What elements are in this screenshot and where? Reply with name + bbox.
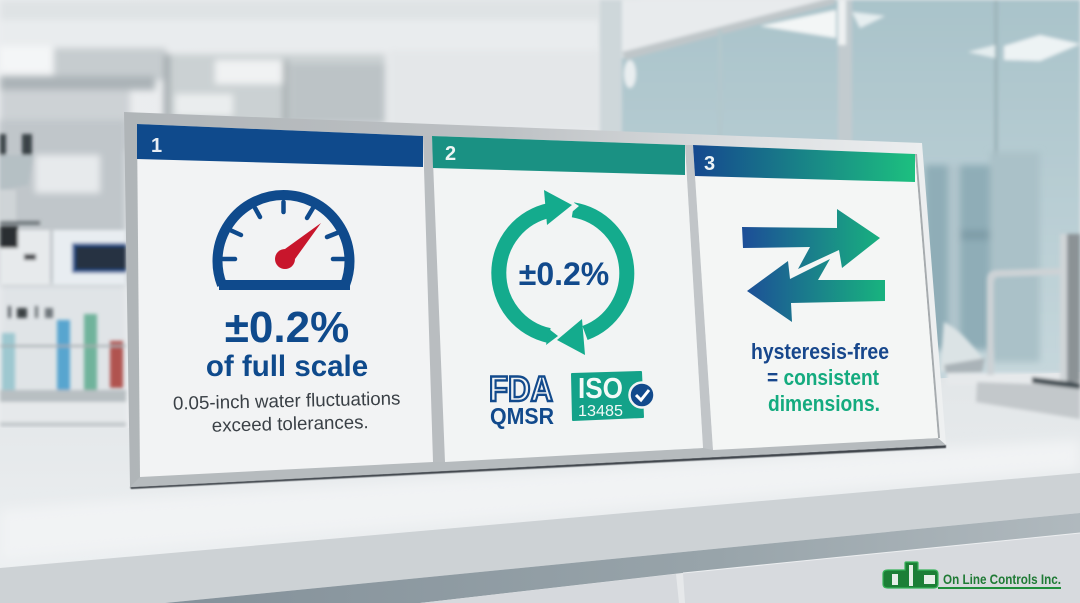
logo: FDA QMSR: QMSR xyxy=(490,403,554,429)
counter top xyxy=(0,372,1080,568)
panel 1 xyxy=(137,124,433,477)
glass partition xyxy=(600,0,1080,385)
icon: check badge xyxy=(630,382,654,408)
panel 2 header: 2 xyxy=(445,143,456,165)
logo: On Line Controls Inc. xyxy=(883,562,1061,589)
panel 3 header xyxy=(693,145,915,182)
metal stand at right xyxy=(940,234,1080,419)
icon: opposing arrows xyxy=(742,209,885,322)
counter front edge xyxy=(0,473,1080,603)
icon: gauge xyxy=(218,195,350,290)
cabinet recess shadow xyxy=(165,513,1080,603)
stat caption: of full scale: of full scale xyxy=(206,350,368,383)
panel 1 header xyxy=(137,124,423,167)
body text: exceed tolerances. xyxy=(212,411,369,436)
panel 2 xyxy=(432,136,703,462)
logo: FDA QMSR: FDA xyxy=(489,370,553,409)
badge: ISO 13485: 13485 xyxy=(578,403,623,420)
body text: 0.05-inch water fluctuations xyxy=(173,387,401,414)
cycle value: ±0.2% xyxy=(519,256,609,292)
cabinets xyxy=(420,533,1080,603)
microscope, device and test tubes xyxy=(0,120,126,427)
panel 2 header xyxy=(432,136,685,175)
panel 1 header: 1 xyxy=(151,135,162,157)
badge: ISO 13485: ISO xyxy=(578,373,623,405)
badge: ISO 13485 xyxy=(571,371,654,421)
panel 3 header: 3 xyxy=(704,153,715,175)
stat: ±0.2%: ±0.2% xyxy=(225,303,349,352)
text: hysteresis-free: hysteresis-free xyxy=(751,339,889,364)
text: = consistent: = consistent xyxy=(767,365,879,390)
shelves behind glass xyxy=(925,152,1040,362)
panel 3 xyxy=(693,145,938,450)
body text xyxy=(173,387,401,437)
logo: FDA QMSR xyxy=(489,370,554,429)
icon: cycle arrows xyxy=(499,190,627,355)
display frame xyxy=(124,112,946,489)
text: dimensions.: dimensions. xyxy=(768,391,880,416)
gauge needle xyxy=(275,223,321,269)
